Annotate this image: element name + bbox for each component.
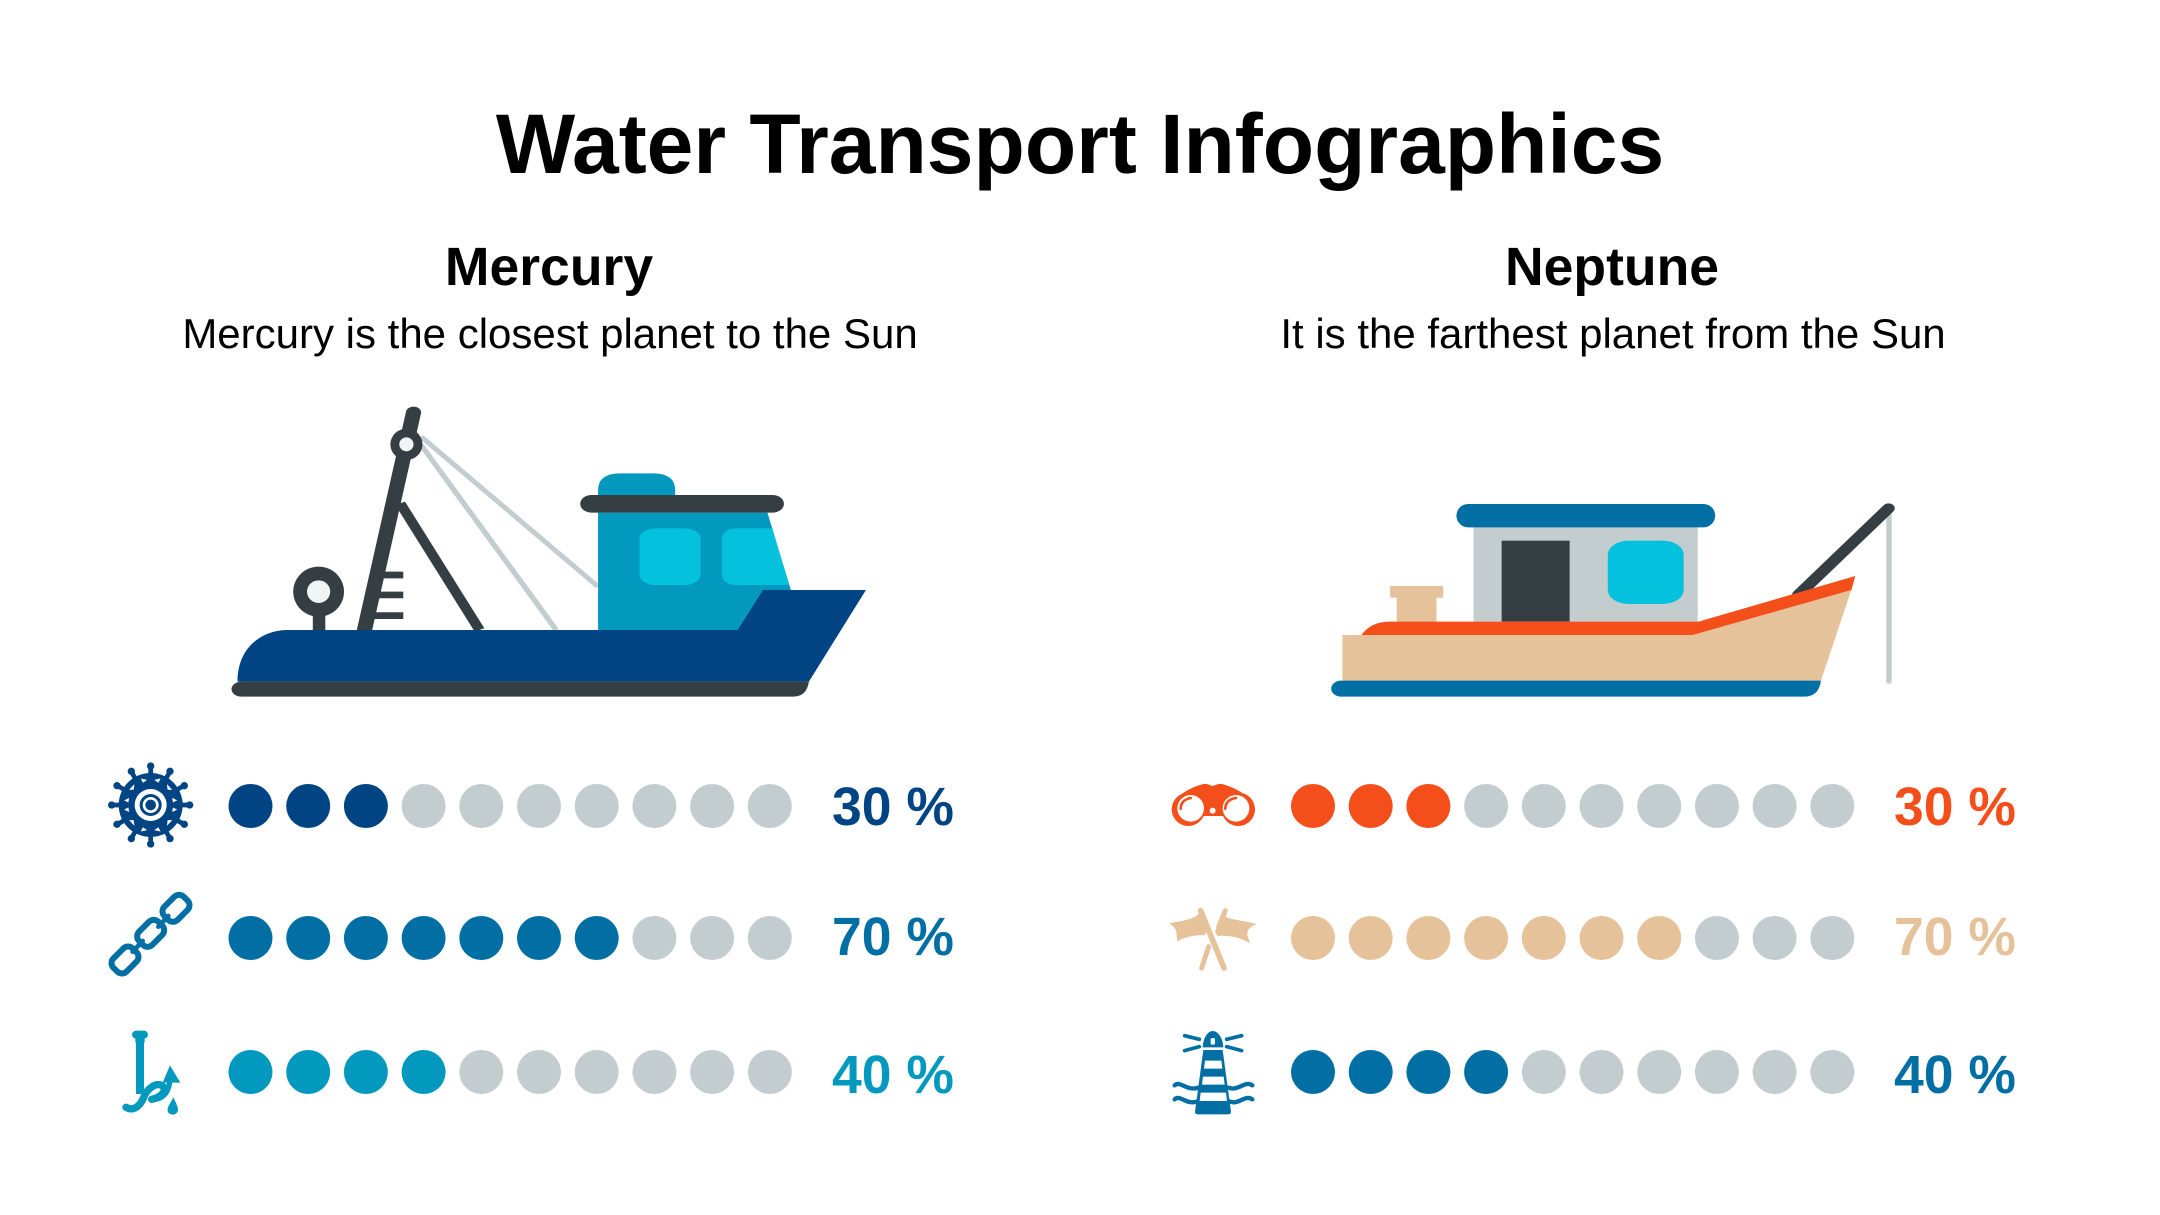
illustration: tan fishing boat bbox=[1331, 504, 1889, 697]
illustration: blue fishing boat bbox=[231, 412, 866, 697]
heading: Mercury: Mercury bbox=[445, 238, 653, 297]
row: chain 70% bbox=[109, 892, 954, 976]
value: 30%: 30 % bbox=[1894, 778, 2016, 837]
icon: chain bbox=[109, 892, 192, 976]
panel: Neptune bbox=[1169, 238, 2016, 1114]
row: hook 40% bbox=[126, 1031, 954, 1115]
title: Water Transport Infographics bbox=[496, 97, 1664, 191]
rating dots: 3 of 10 bbox=[1291, 784, 1854, 828]
icon: hook with arrow and drop bbox=[126, 1031, 180, 1115]
rating dots: 7 of 10 bbox=[228, 916, 792, 960]
icon: ship wheel bbox=[108, 762, 193, 848]
rating dots: 7 of 10 bbox=[1291, 916, 1854, 960]
row: wheel 30% bbox=[108, 762, 954, 848]
value: 30%: 30 % bbox=[832, 778, 954, 837]
text: Mercury description: Mercury is the closest planet to the Sun bbox=[182, 310, 918, 357]
row: binoculars 30% bbox=[1172, 778, 2016, 837]
value: 70%: 70 % bbox=[832, 908, 954, 967]
icon: crossed flags bbox=[1169, 911, 1257, 968]
rating dots: 4 of 10 bbox=[1291, 1050, 1854, 1094]
icon: lighthouse bbox=[1175, 1031, 1252, 1114]
heading: Neptune: Neptune bbox=[1505, 238, 1719, 297]
value: 40%: 40 % bbox=[1894, 1046, 2016, 1105]
panel: Mercury bbox=[108, 238, 954, 1115]
value: 70%: 70 % bbox=[1894, 908, 2016, 967]
rating dots: 4 of 10 bbox=[228, 1050, 792, 1094]
row: lighthouse 40% bbox=[1175, 1031, 2016, 1114]
text: Neptune description: It is the farthest planet from the Sun bbox=[1280, 310, 1946, 357]
icon: binoculars bbox=[1172, 784, 1255, 826]
value: 40%: 40 % bbox=[832, 1046, 954, 1105]
row: flags 70% bbox=[1169, 908, 2016, 968]
rating dots: 3 of 10 bbox=[228, 784, 792, 828]
